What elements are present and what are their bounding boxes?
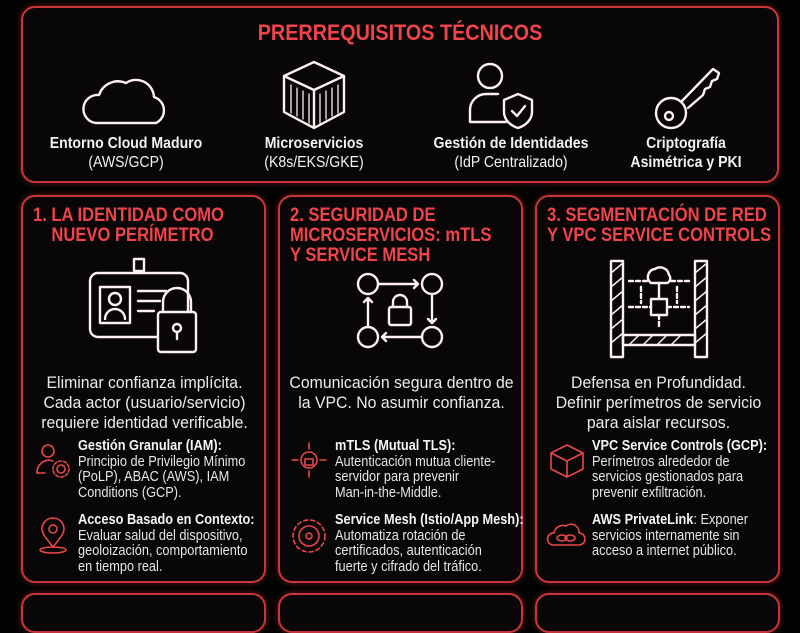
item: service mesh: Service Mesh (Istio/App Mesh): xyxy=(335,512,524,528)
item: privatelink: AWS PrivateLink: Exponer xyxy=(592,512,748,528)
text: desc 2: Comunicación segura dentro de xyxy=(289,373,514,392)
text: desc 2 xyxy=(289,373,514,412)
icon: user gear xyxy=(36,444,70,478)
label: criptografia xyxy=(630,135,742,171)
heading 3 xyxy=(547,204,771,246)
heading 1: NUEVO PERÍMETRO xyxy=(51,224,214,246)
icon: mtls xyxy=(291,442,327,478)
panel: 2 microservicios xyxy=(278,195,523,583)
heading 3: 3. SEGMENTACIÓN DE RED xyxy=(547,204,767,226)
item: contexto: Acceso Basado en Contexto: xyxy=(78,512,255,528)
item: contexto: en tiempo real. xyxy=(78,558,162,574)
text: desc 3: Definir perímetros de servicio xyxy=(556,393,761,412)
item: privatelink xyxy=(592,512,748,559)
label: identidades: Gestión de Identidades xyxy=(434,135,588,152)
item: mTLS: Autenticación mutua cliente- xyxy=(335,454,495,470)
heading 2 xyxy=(290,204,491,266)
label: microservicios: (K8s/EKS/GKE) xyxy=(264,154,364,171)
item: mTLS: Man-in-the-Middle. xyxy=(335,484,441,500)
icon: cube xyxy=(282,60,346,130)
icon: location pin xyxy=(39,517,67,554)
label: criptografia: Asimétrica y PKI xyxy=(630,154,742,171)
label: cloud: Entorno Cloud Maduro xyxy=(50,135,202,152)
item: IAM: (PoLP), ABAC (AWS), IAM xyxy=(78,469,229,485)
heading: prerrequisitos: PRERREQUISITOS TÉCNICOS xyxy=(258,20,542,45)
icon: key xyxy=(654,68,720,130)
icon: gear mesh xyxy=(292,519,326,553)
text: desc 1: Eliminar confianza implícita. xyxy=(47,373,242,392)
text: desc 2: la VPC. No asumir confianza. xyxy=(298,393,505,412)
panel: prerrequisitos xyxy=(21,6,779,183)
label: cloud: (AWS/GCP) xyxy=(88,154,164,171)
text: desc 1: requiere identidad verificable. xyxy=(41,413,248,432)
text: desc 3: Defensa en Profundidad. xyxy=(571,373,746,392)
heading 2: MICROSERVICIOS: mTLS xyxy=(290,224,491,246)
panel: 3 segmentacion xyxy=(535,195,780,583)
icon: cloud xyxy=(82,78,166,124)
label: criptografia: Criptografía xyxy=(646,135,726,152)
item: IAM: Principio de Privilegio Mínimo xyxy=(78,454,245,470)
item: VPC SC: Perímetros alrededor de xyxy=(592,454,730,470)
item: service mesh: Automatiza rotación de xyxy=(335,528,466,544)
heading 2: Y SERVICE MESH xyxy=(290,244,430,266)
item: mTLS xyxy=(335,438,495,500)
item: VPC SC: servicios gestionados para xyxy=(592,469,743,485)
item: service mesh xyxy=(335,512,524,574)
item: contexto: geoloización, comportamiento xyxy=(78,543,248,559)
panel: bottom partial row xyxy=(21,593,266,633)
item: IAM: Gestión Granular (IAM): xyxy=(78,438,222,454)
item: VPC SC xyxy=(592,438,767,500)
item: privatelink: servicios internamente sin xyxy=(592,528,740,544)
item: contexto: Evaluar salud del dispositivo, xyxy=(78,528,243,544)
icon: box xyxy=(550,444,584,478)
text: desc 3: para aislar recursos. xyxy=(587,413,730,432)
text: desc 3 xyxy=(556,373,761,432)
item: VPC SC: VPC Service Controls (GCP): xyxy=(592,438,767,454)
label: cloud xyxy=(50,135,202,171)
heading 1: 1. LA IDENTIDAD COMO xyxy=(33,204,224,226)
item: contexto xyxy=(78,512,255,574)
label: microservicios: Microservicios xyxy=(265,135,363,152)
item: privatelink: acceso a internet público. xyxy=(592,543,737,559)
icon: perimeter xyxy=(610,260,708,358)
text: desc 1 xyxy=(41,373,248,432)
item: service mesh: certificados, autenticación xyxy=(335,543,482,559)
panel: 1 identidad xyxy=(21,195,266,583)
label: identidades xyxy=(434,135,588,171)
icon: user shield xyxy=(468,62,534,130)
item: VPC SC: prevenir exfiltración. xyxy=(592,484,706,500)
icon: mesh lock xyxy=(356,272,444,348)
heading 2: 2. SEGURIDAD DE xyxy=(290,204,436,226)
item: mTLS: mTLS (Mutual TLS): xyxy=(335,438,455,454)
text: desc 1: Cada actor (usuario/servicio) xyxy=(43,393,246,412)
item: IAM xyxy=(78,438,245,500)
item: IAM: Conditions (GCP). xyxy=(78,484,182,500)
heading 3: Y VPC SERVICE CONTROLS xyxy=(547,224,771,246)
icon: cloud link xyxy=(546,523,586,546)
item: mTLS: servidor para prevenir xyxy=(335,469,459,485)
heading 1 xyxy=(33,204,224,246)
label: identidades: (IdP Centralizado) xyxy=(454,154,568,171)
icon: id badge lock xyxy=(88,258,198,354)
item: service mesh: fuerte y cifrado del tráfico. xyxy=(335,558,482,574)
label: microservicios xyxy=(264,135,364,171)
